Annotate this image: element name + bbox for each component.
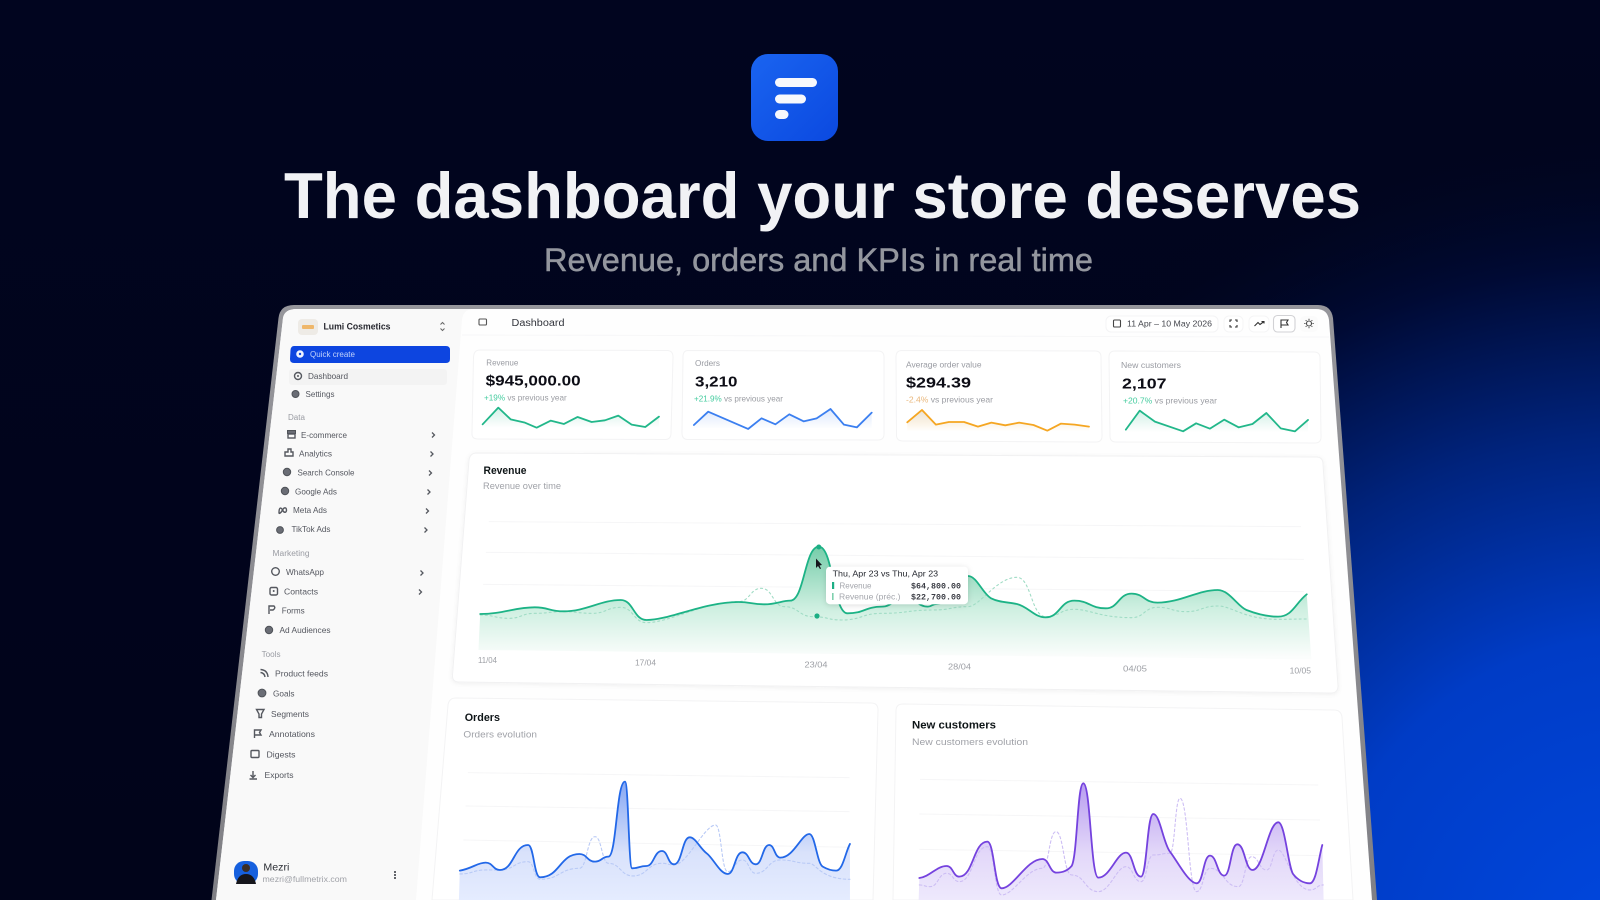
user profile (234, 861, 396, 884)
nav item: whatsapp: WhatsApp (286, 567, 324, 577)
section label: marketing: Marketing (272, 549, 310, 558)
nav item: goals (258, 689, 294, 699)
nav item: forms: Forms (282, 605, 305, 615)
panel: KPI new customers: +20.7% vs previous year (1123, 395, 1217, 405)
panel: KPI average order value: $294.39 (906, 374, 971, 391)
nav item: search console: Search Console (298, 468, 355, 478)
nav item: search console (283, 468, 432, 478)
nav item: contacts: Contacts (284, 586, 318, 596)
nav item: exports (250, 770, 294, 780)
panel: KPI orders: +21.9% vs previous year (694, 394, 783, 404)
tooltip: Thu, Apr 23 vs Thu, Apr 23 (833, 569, 938, 579)
nav item: tiktok ads (277, 524, 427, 534)
subheading: Revenue over time (483, 481, 561, 492)
x-axis labels (478, 655, 1311, 676)
panel: KPI new customers: 2,107 (1122, 376, 1166, 393)
tooltip: $22,700.00 (911, 592, 961, 602)
panel: revenue chart (452, 453, 1338, 693)
nav item: meta ads (279, 505, 428, 515)
nav item: settings: Settings (306, 389, 334, 399)
x-axis labels: 23/04 (804, 660, 828, 670)
tooltip: Revenue (840, 581, 872, 590)
panel: KPI new customers: New customers (1121, 360, 1181, 370)
nav item: digests (251, 750, 296, 760)
area chart (459, 773, 850, 900)
button: quick create: Quick create (310, 349, 355, 359)
sparkline: new customers (1126, 411, 1308, 432)
icon: brand logo (751, 54, 838, 141)
tooltip (826, 567, 968, 604)
nav item: meta ads: Meta Ads (293, 505, 327, 515)
sparkline: revenue (483, 408, 659, 428)
dashboard screenshot (212, 305, 1377, 900)
subtitle: Revenue, orders and KPIs in real time (544, 242, 1093, 278)
heading: New customers (912, 719, 996, 731)
nav item: segments: Segments (271, 709, 309, 719)
panel: KPI new customers (1109, 351, 1321, 443)
heading: Orders (465, 712, 500, 724)
date range picker: 11 Apr – 10 May 2026 (1127, 318, 1212, 328)
section label: data: Data (288, 413, 306, 422)
x-axis labels: 11/04 (478, 655, 497, 665)
panel: sidebar (216, 309, 472, 900)
nav item: ad audiences: Ad Audiences (280, 625, 330, 635)
subheading: New customers evolution (912, 737, 1028, 748)
heading: Revenue (484, 465, 526, 477)
nav item: tiktok ads: TikTok Ads (292, 524, 330, 534)
workspace selector (298, 319, 444, 335)
header bar (462, 316, 1329, 337)
device frame (212, 305, 1377, 900)
subheading: Orders evolution (463, 729, 537, 740)
icon: trend (1249, 316, 1269, 332)
data point: previous revenue (814, 613, 820, 619)
panel: KPI revenue: +19% vs previous year (484, 393, 567, 403)
panel: KPI orders: 3,210 (695, 374, 738, 391)
x-axis labels: 10/05 (1290, 666, 1311, 676)
workspace selector: Lumi Cosmetics (324, 322, 390, 332)
nav item: e-commerce (288, 430, 434, 440)
user profile: Mezri (263, 863, 289, 874)
area chart (919, 779, 1324, 900)
panel: KPI average order value (896, 350, 1102, 442)
nav item: e-commerce: E-commerce (301, 430, 347, 440)
icon: annotations flag (1274, 316, 1295, 332)
x-axis labels: 28/04 (948, 662, 971, 672)
panel: orders chart (432, 698, 878, 900)
user profile: mezri@fullmetrix.com (262, 874, 347, 884)
nav item: product feeds: Product feeds (275, 669, 328, 679)
nav item: annotations: Annotations (269, 729, 315, 739)
panel: KPI orders: Orders (695, 358, 720, 368)
nav item: analytics: Analytics (299, 448, 332, 458)
icon: sidebar toggle (479, 319, 486, 325)
panel: KPI average order value: Average order value (906, 359, 982, 369)
panel: new customers chart (893, 704, 1353, 900)
nav item: whatsapp (272, 567, 423, 577)
title: The dashboard your store deserves (284, 159, 1361, 232)
nav item: contacts (270, 586, 422, 596)
nav item: dashboard: Dashboard (308, 371, 348, 381)
nav item: dashboard (289, 369, 447, 385)
section label: tools: Tools (262, 650, 281, 659)
nav item: settings (292, 389, 334, 399)
panel: KPI revenue (472, 350, 673, 440)
nav item: goals: Goals (273, 689, 294, 699)
date range picker (1106, 316, 1218, 332)
nav item: analytics (285, 448, 433, 458)
sparkline: orders (694, 409, 872, 429)
nav item: forms (269, 605, 305, 615)
nav item: google ads: Google Ads (295, 486, 337, 496)
sparkline: average order value (907, 410, 1089, 431)
page title: Dashboard (512, 318, 564, 329)
nav item: digests: Digests (266, 750, 296, 760)
tooltip: Revenue (préc.) (839, 592, 901, 601)
panel: KPI average order value: -2.4% vs previous year (906, 395, 993, 405)
nav item: google ads (281, 486, 430, 496)
panel: KPI orders (682, 350, 884, 440)
icon: theme sun (1300, 316, 1318, 332)
panel: KPI revenue: $945,000.00 (486, 373, 581, 390)
x-axis labels: 04/05 (1123, 664, 1147, 674)
x-axis labels: 17/04 (635, 658, 656, 668)
screen background (216, 309, 1372, 900)
area chart (478, 522, 1311, 659)
icon: fullscreen (1224, 316, 1243, 332)
data point: highlighted revenue (816, 544, 821, 550)
icon: mouse cursor (816, 558, 822, 569)
panel: KPI revenue: Revenue (486, 357, 519, 367)
button: quick create (290, 346, 450, 363)
tooltip: $64,800.00 (911, 581, 961, 591)
nav item: exports: Exports (264, 770, 294, 780)
